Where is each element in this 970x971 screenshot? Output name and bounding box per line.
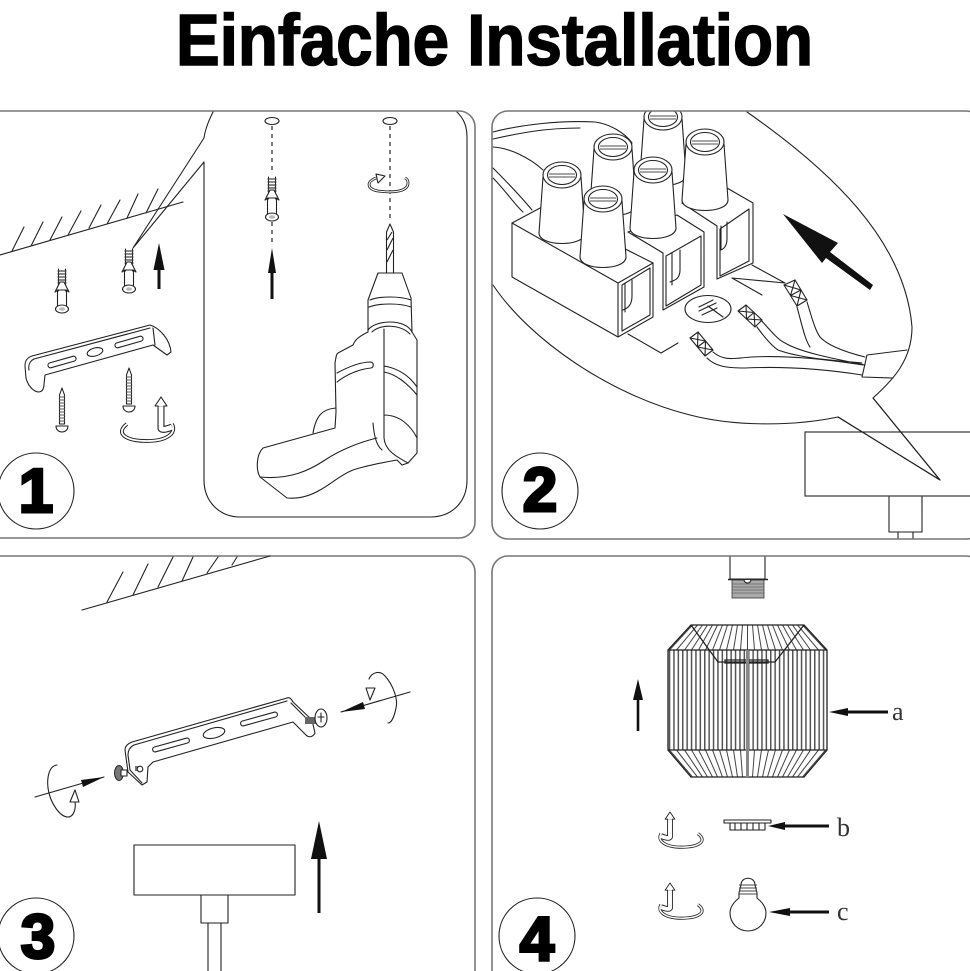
number badge 1: 1 bbox=[19, 457, 53, 526]
fixture box bbox=[805, 398, 970, 545]
right rotate arrow bbox=[341, 672, 410, 723]
earth symbol bbox=[685, 296, 731, 322]
number badge 1 bbox=[0, 453, 74, 529]
canopy bbox=[134, 845, 295, 971]
label a with arrow bbox=[829, 697, 904, 726]
label b with arrow bbox=[768, 813, 850, 842]
number badge 3 bbox=[0, 898, 74, 971]
wall anchors bbox=[55, 249, 136, 313]
socket bbox=[728, 557, 768, 598]
callout lines bbox=[133, 138, 204, 248]
inset frame bbox=[204, 112, 467, 517]
panel 2 frame bbox=[492, 111, 970, 539]
cable sleeve bbox=[862, 350, 907, 378]
screws bbox=[56, 368, 135, 432]
ceiling hatch bbox=[82, 556, 270, 610]
label b with arrow: b bbox=[837, 813, 850, 842]
screw cones bbox=[539, 104, 728, 268]
panel: step 2 bbox=[492, 104, 970, 545]
panel: step 4 bbox=[492, 556, 970, 971]
wire crimps bbox=[690, 280, 807, 356]
diffuser part b bbox=[724, 820, 771, 830]
panel: step 3 bbox=[0, 556, 475, 971]
wall hatch bbox=[0, 189, 183, 255]
rotate arrow bbox=[122, 397, 173, 441]
number badge 2: 2 bbox=[523, 456, 557, 525]
arrow up bbox=[154, 243, 164, 289]
number badge 2 bbox=[502, 453, 578, 529]
drill bbox=[257, 224, 417, 498]
panel: step 1 bbox=[0, 111, 475, 538]
number badge 3: 3 bbox=[21, 903, 55, 971]
arrow up large bbox=[311, 821, 327, 913]
label c with arrow: c bbox=[837, 897, 849, 926]
mounting bracket bbox=[125, 698, 315, 785]
hook c bbox=[660, 883, 702, 918]
bolt right bbox=[305, 709, 327, 727]
arrow up small bbox=[633, 679, 643, 731]
bulb bbox=[730, 878, 766, 931]
hook b bbox=[660, 812, 702, 847]
callout bubble bbox=[493, 112, 940, 480]
terminal block bbox=[512, 188, 753, 337]
lamp shade a bbox=[668, 625, 827, 777]
guide lines bbox=[628, 265, 785, 353]
inset arrow up bbox=[268, 248, 276, 299]
title: Einfache Installation bbox=[176, 1, 813, 81]
bolt left bbox=[114, 766, 127, 780]
black arrow bbox=[783, 214, 873, 290]
feed wires bbox=[493, 122, 632, 212]
wires bbox=[707, 302, 865, 375]
rotation symbol bbox=[369, 174, 408, 192]
left rotate arrow bbox=[35, 765, 104, 817]
number badge 4 bbox=[499, 898, 575, 971]
label c with arrow bbox=[769, 897, 849, 926]
inset: drill holes and guide lines bbox=[265, 118, 397, 246]
wiring scene bbox=[493, 104, 970, 545]
bracket bbox=[25, 325, 171, 392]
label a with arrow: a bbox=[892, 697, 904, 726]
